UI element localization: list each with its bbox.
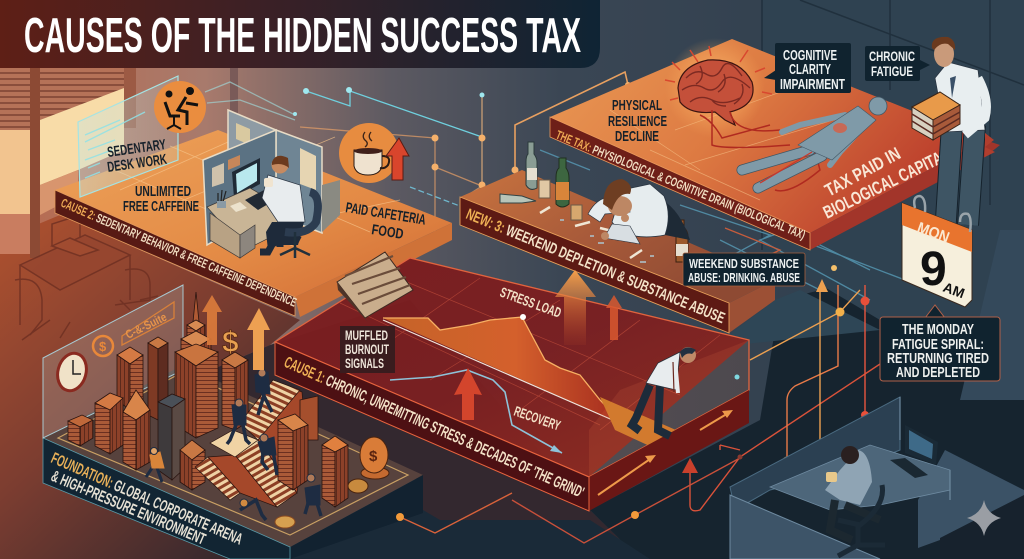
man slumped on desk <box>588 179 690 244</box>
foundation label <box>48 450 245 549</box>
callout: cognitive clarity impairment <box>764 43 851 93</box>
glass backdrop <box>43 285 183 438</box>
tax paid in biological capital label: TAX PAID IN <box>821 143 904 201</box>
recovery label: RECOVERY <box>512 403 563 434</box>
walking tired man <box>632 347 696 436</box>
stairs climb <box>195 380 305 507</box>
upward arrows over foundation <box>202 295 270 370</box>
callout: cognitive clarity impairment: IMPAIRMENT <box>780 77 845 93</box>
text: paid cafeteria food <box>344 200 427 243</box>
tax paid in biological capital label: BIOLOGICAL CAPITAL <box>820 144 953 223</box>
icon: monday 9am calendar: MON <box>915 220 951 247</box>
stress load label: STRESS LOAD <box>498 284 564 321</box>
cause 2 label strip <box>55 190 295 316</box>
background desk with laptop <box>15 215 158 340</box>
cubicle: returning tired worker <box>730 397 1024 559</box>
dollar coin on glass: $ <box>99 339 107 354</box>
text: sedentary desk work: SEDENTARY <box>106 137 167 161</box>
stress chart area <box>383 317 624 425</box>
foundation surface <box>43 365 423 547</box>
weekend label strip <box>460 197 729 333</box>
text: unlimited free caffeine: FREE CAFFEINE <box>123 199 199 215</box>
callout: chronic fatigue <box>865 46 930 81</box>
callout: chronic fatigue: FATIGUE <box>871 63 913 79</box>
foundation front strip <box>43 438 290 559</box>
right buildings <box>278 396 348 507</box>
icon: sparkle star <box>967 500 1001 536</box>
callout: cognitive clarity impairment: COGNITIVE <box>783 48 837 64</box>
upward arrows above cause 1 <box>555 270 622 345</box>
callout: monday fatigue spiral: AND DEPLETED <box>896 364 980 381</box>
text: physical resilience decline: DECLINE <box>615 128 659 145</box>
muffled burnout signals callout: MUFFLED <box>345 328 388 343</box>
text: physical resilience decline: RESILIENCE <box>608 113 667 130</box>
callout: weekend substance abuse: ABUSE: DRINKING. ABUSE <box>688 270 800 285</box>
stairs between cause 2 and cause 1 <box>337 252 413 322</box>
skyline buildings <box>68 292 248 490</box>
cause 2 right side <box>295 223 452 317</box>
text: paid cafeteria food: FOOD <box>370 222 404 243</box>
title banner <box>0 0 600 68</box>
text: physical resilience decline: PHYSICAL <box>612 97 662 114</box>
title banner: CAUSES OF THE HIDDEN SUCCESS TAX <box>24 9 581 63</box>
callout: monday fatigue spiral: RETURNING TIRED <box>887 350 989 367</box>
icon: monday 9am calendar: AM <box>941 279 967 301</box>
dollar sign statue: $ <box>222 326 239 359</box>
icon: monday 9am calendar <box>902 196 972 307</box>
tax label: THE TAX: PHYSIOLOGICAL & COGNITIVE DRAIN (BIOLOGICAL TAX) <box>554 128 807 242</box>
weekend label: NEW: 3: WEEKEND DEPLETION & SUBSTANCE ABUSE <box>463 206 727 327</box>
clock icon <box>54 350 90 394</box>
cause 1 right side <box>589 390 749 511</box>
stacked gold coins <box>275 437 389 528</box>
muffled burnout signals callout: BURNOUT <box>345 342 389 357</box>
callout: monday fatigue spiral: THE MONDAY <box>902 321 974 338</box>
recovery line <box>390 370 562 453</box>
window with blinds <box>0 68 238 258</box>
icon: sedentary worker <box>154 81 206 133</box>
stacked gold coins: $ <box>369 448 378 465</box>
tax surface <box>550 39 985 233</box>
panel: foundation platform <box>43 285 423 559</box>
dollar coin on glass <box>93 336 113 356</box>
red up arrow <box>454 368 482 420</box>
circuit lines: cyan and orange connectors <box>205 72 905 300</box>
cause 2 surface <box>55 130 452 297</box>
callout: chronic fatigue: CHRONIC <box>869 48 915 64</box>
text: unlimited free caffeine <box>123 184 199 215</box>
text: sedentary desk work: DESK WORK <box>106 152 168 176</box>
bottles and debris on desk <box>500 142 688 262</box>
weekend surface <box>460 170 775 303</box>
red flag tail behind man <box>985 133 995 157</box>
cause 1 surface <box>275 258 749 477</box>
lying body with red nerve lines <box>700 97 887 191</box>
climbing business people <box>146 369 321 520</box>
panel: cause 2 platform <box>55 130 452 317</box>
tax label strip <box>550 117 810 250</box>
callout: weekend substance abuse: WEEKEND SUBSTANCE <box>689 256 799 271</box>
icon: coffee cup with up arrow <box>339 123 409 183</box>
panel: new 3 weekend depletion platform <box>460 170 775 333</box>
panel: cause 1 platform <box>275 258 749 511</box>
chart baseline <box>383 320 624 425</box>
cause 1 label strip <box>275 342 589 511</box>
foundation right side <box>290 475 423 559</box>
cause 2 label: CAUSE 2: SEDENTARY BEHAVIOR & FREE CAFFEINE DEPENDENCE <box>59 196 299 310</box>
text: unlimited free caffeine: UNLIMITED <box>135 184 191 200</box>
cubicle with worker at desk <box>203 110 340 258</box>
callout: monday fatigue spiral <box>880 305 1000 381</box>
muffled burnout signals callout <box>340 326 395 373</box>
callout: weekend substance abuse <box>683 253 805 286</box>
amber path under walking man <box>600 397 699 455</box>
tax paid in biological capital label <box>820 143 953 223</box>
side arrows <box>598 412 730 495</box>
icon: monday 9am calendar: 9 <box>920 243 947 296</box>
panel: the tax platform <box>550 39 1000 250</box>
icon: glowing brain <box>665 38 772 138</box>
text: sedentary desk work <box>106 137 168 176</box>
callout: monday fatigue spiral: FATIGUE SPIRAL: <box>892 336 984 353</box>
text: paid cafeteria food: PAID CAFETERIA <box>344 200 427 229</box>
tax right side <box>810 140 1000 250</box>
weekend right side <box>729 280 775 333</box>
muffled burnout signals callout: SIGNALS <box>345 356 384 371</box>
text: physical resilience decline <box>608 97 667 145</box>
glass panel: desk work screen <box>78 76 178 197</box>
callout: cognitive clarity impairment: CLARITY <box>789 62 831 78</box>
c-suite sign: C-&-Suite <box>123 310 169 342</box>
fatigued man holding books <box>912 37 986 235</box>
connector lines and nodes: bottom right <box>396 279 880 543</box>
